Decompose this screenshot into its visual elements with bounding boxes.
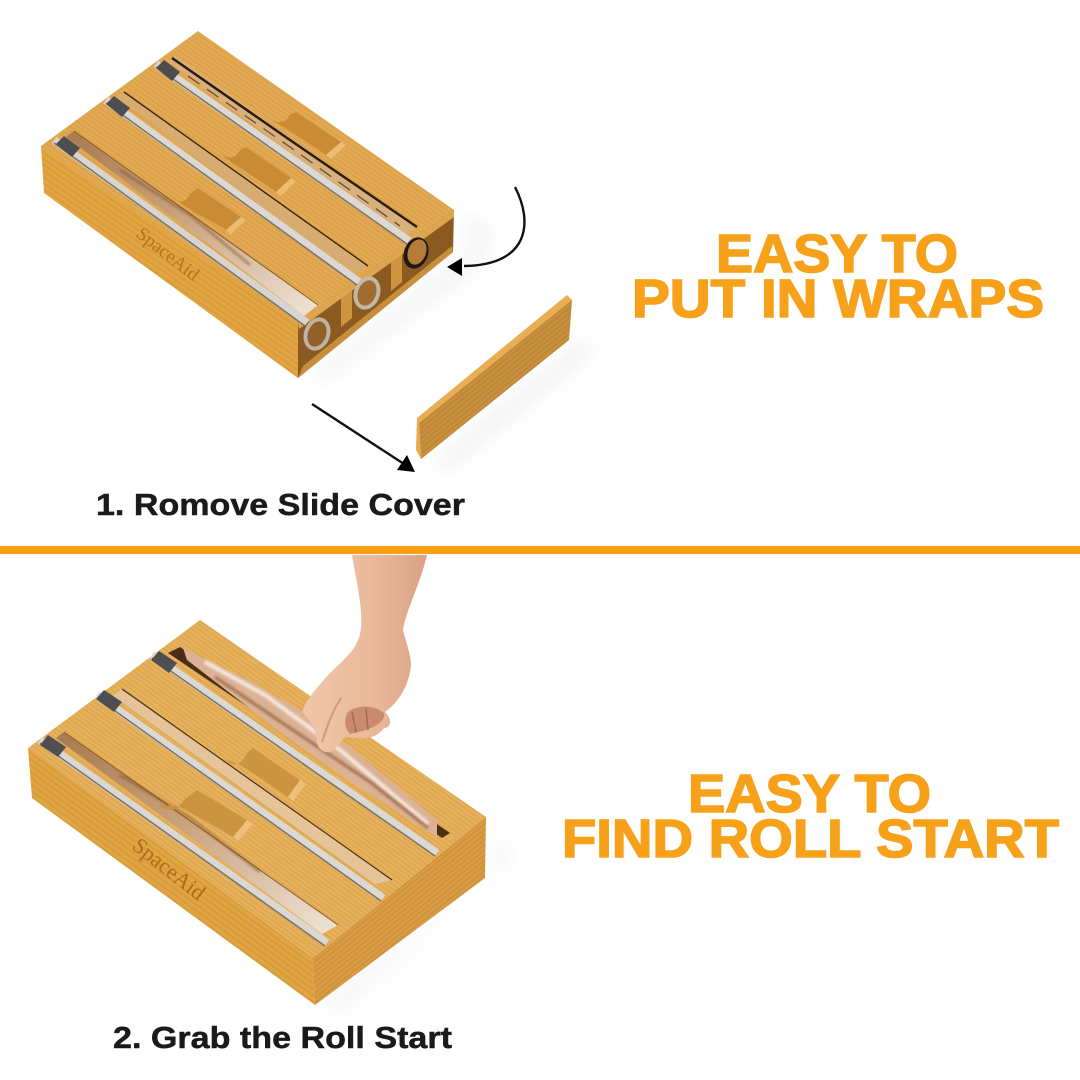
- finger notch 1: [170, 188, 246, 234]
- foil window 1: [56, 732, 338, 934]
- heading: easy to put in wraps: PUT IN WRAPS: [632, 269, 1044, 329]
- heading: easy to find roll start: EASY TO: [688, 764, 931, 824]
- hand and arm: [302, 555, 427, 752]
- box left face: [28, 748, 315, 1005]
- box left face: [41, 146, 298, 378]
- heading: easy to find roll start: FIND ROLL START: [562, 809, 1059, 869]
- cutter bar 3: [151, 651, 437, 856]
- orange divider: [0, 546, 1080, 554]
- box right face: [313, 817, 486, 1005]
- wrap window 2: [117, 92, 368, 277]
- finger notch 2: [220, 147, 296, 196]
- wrap window 2: [113, 689, 392, 884]
- heading: easy to put in wraps: EASY TO: [716, 224, 958, 284]
- box top face: [41, 31, 454, 322]
- arrow: straight arrow to slide cover: [312, 404, 415, 472]
- box top face: [28, 620, 486, 958]
- cutter bar 2: [106, 96, 359, 285]
- finger notch 1: [158, 790, 253, 841]
- heading: easy to put in wraps: [632, 224, 1044, 329]
- step 2 dispenser with hand: [28, 555, 510, 1012]
- cutter bar 2: [96, 690, 383, 901]
- cutter bar 3: [156, 60, 409, 244]
- caption: step 2: 2. Grab the Roll Start: [113, 1020, 452, 1055]
- engraved logo: SpaceAid: [128, 832, 210, 905]
- wrap window 3: [168, 56, 417, 238]
- finger notch 2: [225, 748, 306, 801]
- removed slide cover: [416, 295, 590, 470]
- caption: step 1: 1. Romove Slide Cover: [96, 487, 465, 522]
- dark slot 3: [168, 647, 450, 838]
- step 1 dispenser with slide cover removed: [41, 31, 490, 380]
- heading: easy to find roll start: [562, 764, 1059, 869]
- open end with rolls: [298, 210, 454, 378]
- pulled out foil wrap: [183, 648, 437, 837]
- cutter bar 1: [40, 735, 327, 946]
- engraved logo: SpaceAid: [132, 223, 203, 286]
- foil window 1: [66, 131, 318, 316]
- finger notch 3: [270, 112, 346, 159]
- arrow: curved arrow to open end: [447, 187, 524, 276]
- cutter bar 1: [54, 136, 307, 326]
